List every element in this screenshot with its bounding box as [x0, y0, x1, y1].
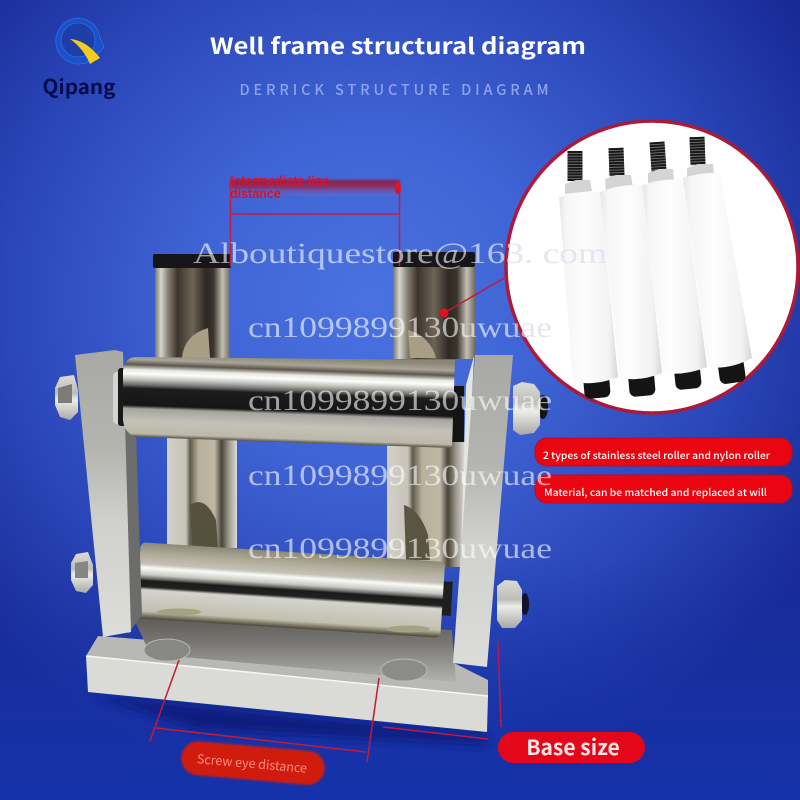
nut: upper right — [513, 382, 548, 435]
lower post: right — [387, 442, 465, 567]
nylon roller 3 — [642, 142, 707, 390]
screw hole: left — [144, 639, 190, 661]
label: base size — [498, 732, 645, 763]
inset circle: nylon rollers — [506, 121, 798, 413]
watermark text: Alboutiquestore@163. com — [193, 237, 607, 270]
label: roller types — [535, 438, 792, 466]
lower post: left — [167, 436, 237, 548]
icon: Q mark — [56, 18, 104, 64]
watermark text: Alboutiquestore@163. com — [193, 237, 607, 270]
base plate — [86, 610, 488, 732]
logo: Qipang — [42, 18, 116, 100]
title: Well frame structural diagram — [210, 29, 586, 61]
nut: lower right — [497, 580, 529, 628]
upper post: right — [393, 252, 475, 359]
upper roller — [113, 357, 464, 448]
nut: lower left — [71, 552, 93, 593]
label: base size: Base size — [526, 732, 620, 762]
nylon roller 1 — [559, 151, 618, 399]
watermark text: cn1099899130uwuae — [248, 311, 552, 344]
nylon roller 4 — [683, 137, 752, 385]
drop shadow under base — [90, 695, 487, 745]
right bracket — [453, 355, 513, 667]
subtitle: DERRICK STRUCTURE DIAGRAM — [240, 79, 548, 100]
nylon roller 2 — [600, 148, 662, 397]
label: distance — [230, 187, 281, 201]
upper post: left — [153, 254, 231, 359]
watermark text: cn1099899130uwuae — [248, 311, 552, 344]
watermark text: cn1099899130uwuae — [248, 459, 552, 492]
brand name: Qipang — [42, 71, 116, 100]
label: screw eye distance: Screw eye distance — [196, 748, 308, 777]
watermark text: cn1099899130uwuae — [248, 384, 552, 417]
lower roller — [128, 542, 453, 638]
watermark text: cn1099899130uwuae — [248, 532, 552, 565]
label: roller types: 2 types of stainless steel roller and nylon roller — [543, 447, 771, 462]
label: screw eye distance — [180, 740, 326, 786]
label: Intermediate line — [230, 174, 329, 188]
measurement: base size — [383, 641, 501, 739]
label: material: Material, can be matched and replaced at will — [544, 484, 767, 499]
nut: upper left — [55, 375, 78, 420]
callout line to roller — [440, 277, 506, 318]
left bracket — [75, 350, 142, 637]
measurement: screw eye distance — [150, 660, 379, 762]
measurement: intermediate line distance — [230, 174, 401, 266]
watermark text — [193, 237, 607, 565]
screw hole: right — [381, 659, 427, 681]
label: material — [535, 475, 792, 503]
